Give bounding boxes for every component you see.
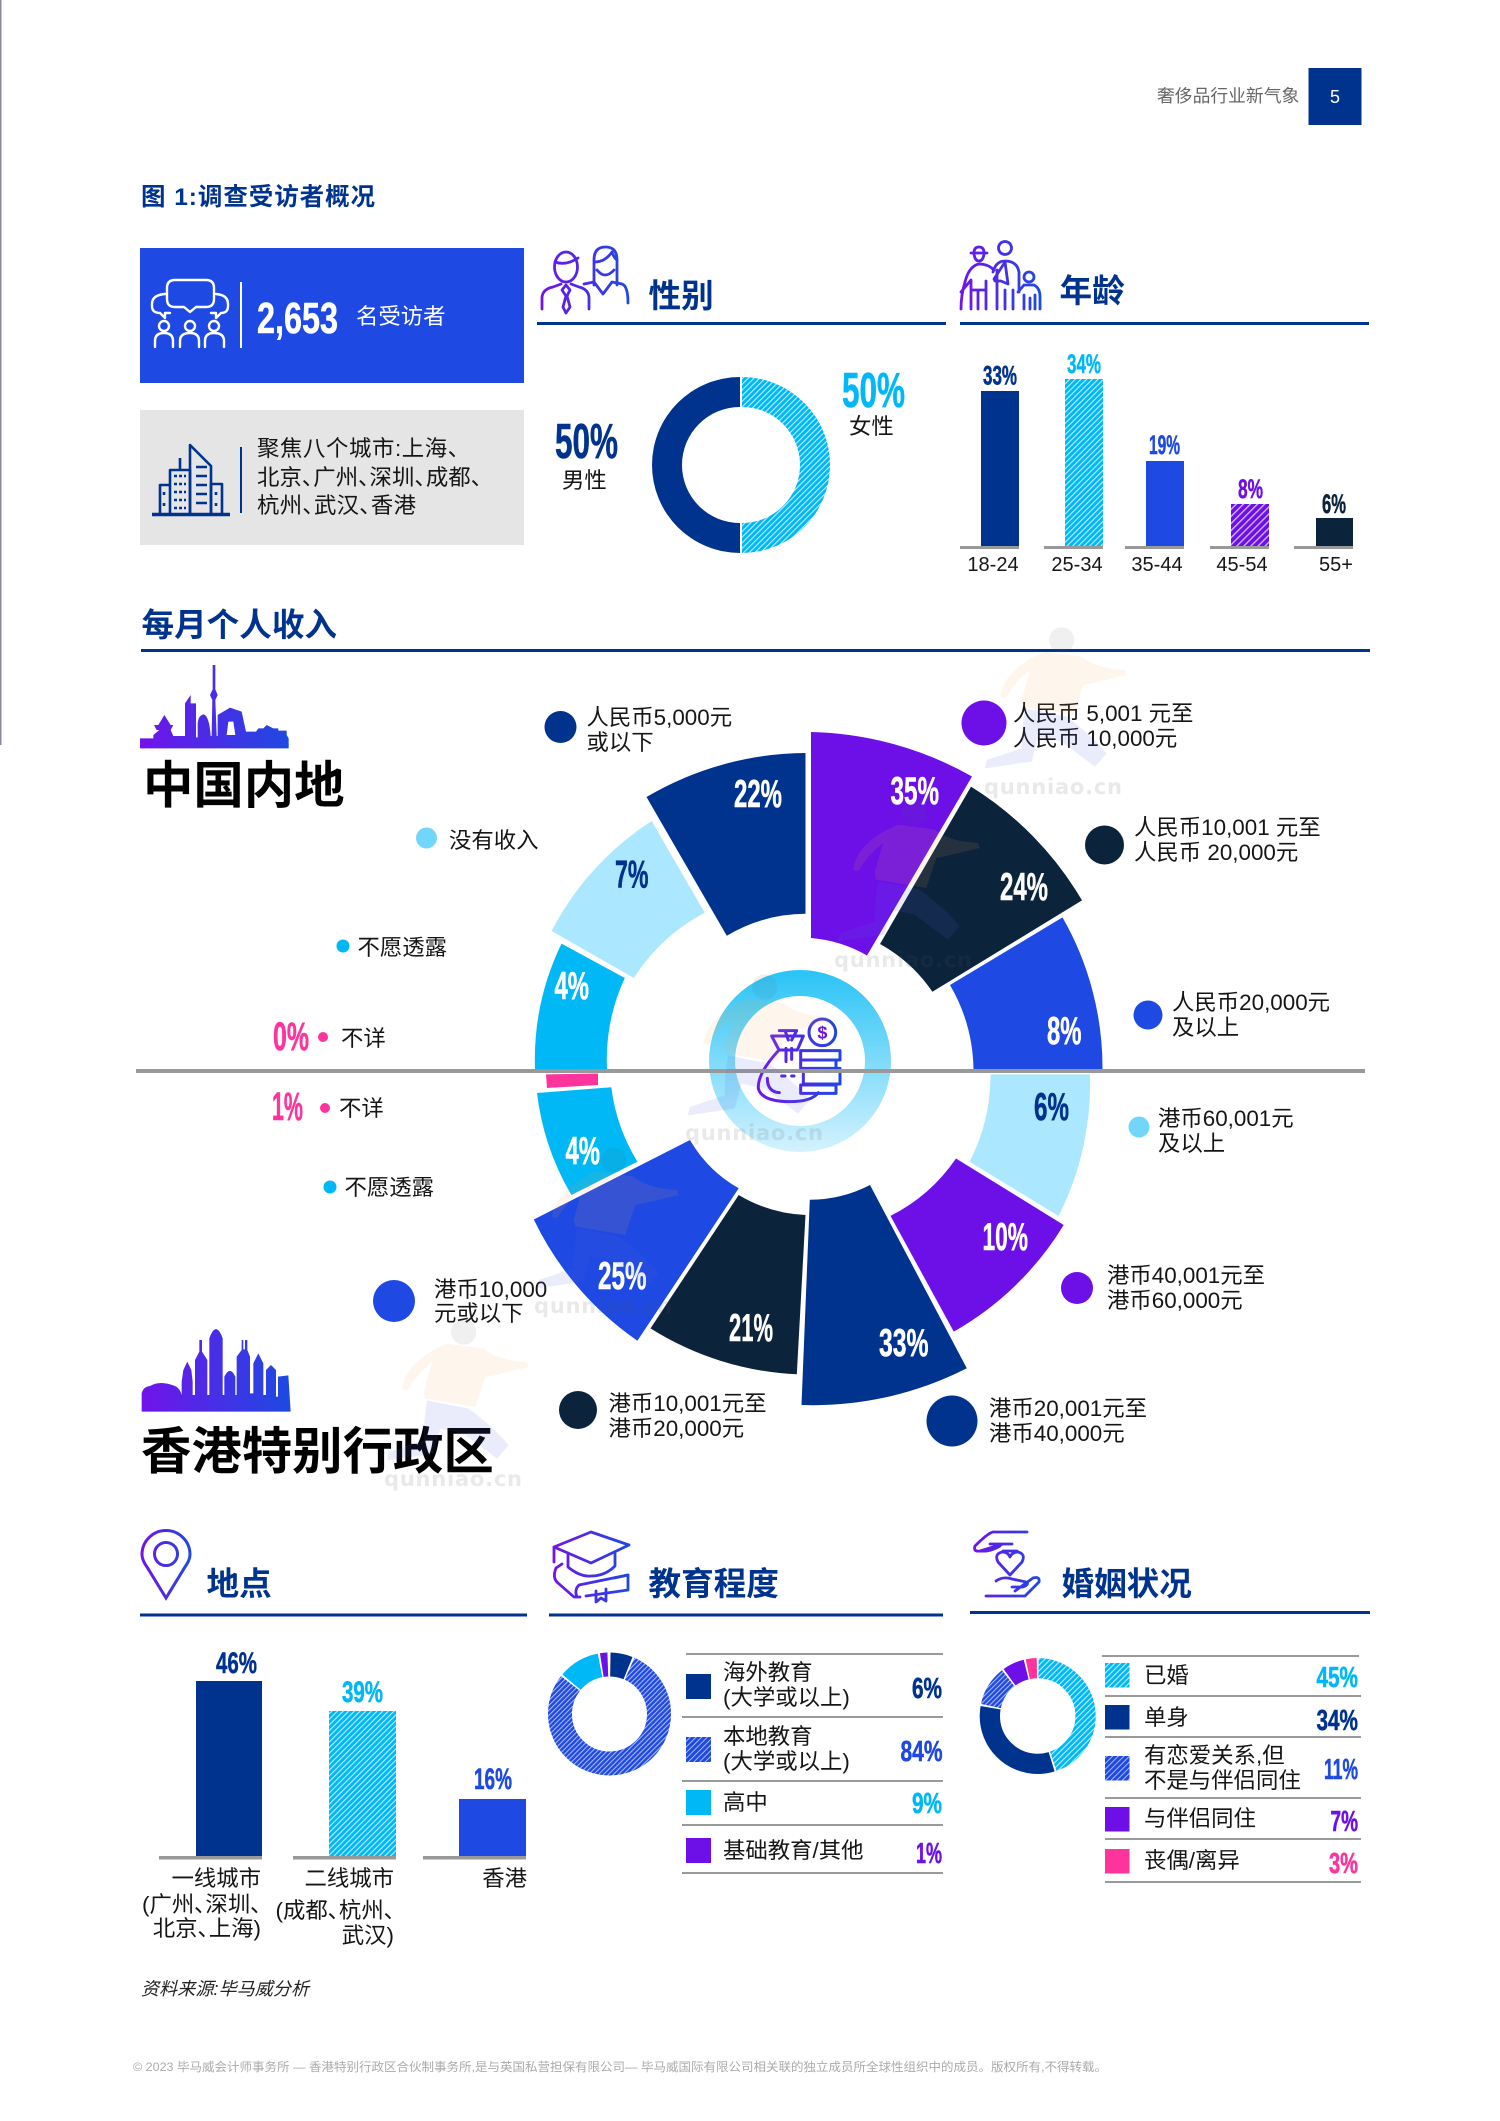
sector 4% bbox=[537, 1087, 637, 1195]
report name: 奢侈品行业新气象 bbox=[1157, 86, 1299, 106]
heading: marital status: 婚姻状况 bbox=[1062, 1565, 1192, 1602]
row: overseas: 6% bbox=[912, 1673, 942, 1705]
percent labels: sectors: 35% bbox=[890, 770, 939, 813]
bar tier 1: 46% bbox=[216, 1647, 257, 1680]
row: single bbox=[1105, 1705, 1358, 1737]
panel: marital status bbox=[970, 1532, 1370, 1883]
respondent label: 名受访者 bbox=[356, 304, 446, 329]
label: male: 50% bbox=[555, 415, 618, 469]
bar 25-34 bbox=[1044, 349, 1103, 576]
legend item: 40,001-60,000: 港币40,001元至 bbox=[1107, 1263, 1265, 1288]
icon: city buildings bbox=[152, 445, 230, 514]
icon: map pin bbox=[142, 1530, 190, 1598]
bar 35-44: 19% bbox=[1149, 430, 1180, 460]
legend item: above 20,000: 人民币20,000元 bbox=[1172, 990, 1330, 1015]
bar 25-34: 25-34 bbox=[1051, 554, 1103, 576]
table: marital status bbox=[1102, 1655, 1361, 1883]
label: female: 50% bbox=[842, 364, 905, 418]
legend item: unknown bbox=[273, 1015, 386, 1059]
sector 7% bbox=[552, 821, 705, 978]
label: male: 男性 bbox=[562, 468, 607, 493]
row: cohabiting: 与伴侣同住 bbox=[1144, 1806, 1256, 1831]
donut: gender bbox=[652, 377, 830, 553]
heading: education: 教育程度 bbox=[648, 1565, 779, 1602]
legend item: 10,001-20,000: 人民币 20,000元 bbox=[1134, 840, 1298, 865]
bar chart: location bbox=[142, 1647, 527, 1948]
percent labels: sectors bbox=[554, 770, 1082, 1365]
label: female: 女性 bbox=[849, 414, 894, 439]
bar tier 1: 北京、上海) bbox=[153, 1916, 261, 1941]
heading rule bbox=[140, 1614, 527, 1616]
bar 45-54: 8% bbox=[1238, 474, 1263, 504]
page number box bbox=[1308, 68, 1362, 125]
donut: marital status bbox=[990, 1668, 1086, 1764]
bar 18-24: 18-24 bbox=[967, 554, 1019, 576]
row: high school: 9% bbox=[912, 1788, 942, 1820]
legend item: above 20,000: 及以上 bbox=[1172, 1015, 1239, 1040]
row: local: 本地教育 bbox=[723, 1724, 813, 1749]
watermark text: qunniao.cn bbox=[984, 775, 1122, 799]
bar 55+: 55+ bbox=[1319, 554, 1353, 576]
bar Hong Kong: 16% bbox=[474, 1763, 512, 1796]
panel: cities bbox=[140, 410, 524, 545]
legend item: 10,000 or less bbox=[373, 1277, 547, 1326]
bar chart: age bbox=[960, 349, 1353, 576]
chart: mainland income sectors bbox=[535, 732, 1103, 1069]
row: basic: 1% bbox=[916, 1838, 942, 1870]
legend item: unknown: 0% bbox=[273, 1015, 309, 1059]
row: widowed or divorced: 丧偶/离异 bbox=[1144, 1848, 1240, 1873]
row: high school: 高中 bbox=[723, 1790, 768, 1815]
watermark text bbox=[384, 775, 1122, 1491]
row: single: 单身 bbox=[1144, 1705, 1189, 1730]
icon: three generations bbox=[961, 242, 1040, 309]
legend item: 5,001-10,000: 人民币 10,000元 bbox=[1013, 726, 1177, 751]
icon: cap and book bbox=[554, 1532, 629, 1602]
percent labels: sectors: 8% bbox=[1047, 1010, 1082, 1053]
bar tier 2: 39% bbox=[342, 1676, 383, 1709]
bar tier 1: (广州、深圳、 bbox=[142, 1892, 261, 1917]
chart: Hong Kong income sectors bbox=[534, 1074, 1090, 1405]
sector 6% bbox=[970, 1074, 1090, 1216]
bar tier 1: 一线城市 bbox=[171, 1866, 261, 1891]
row: married: 45% bbox=[1316, 1662, 1358, 1694]
row: high school bbox=[686, 1788, 942, 1820]
row: dating bbox=[1105, 1743, 1358, 1793]
legend item: 40,001-60,000: 港币60,000元 bbox=[1107, 1288, 1243, 1313]
heading: gender: 性别 bbox=[648, 277, 714, 314]
icon: money bag and coins bbox=[758, 1019, 840, 1102]
center divider bbox=[136, 1069, 1365, 1073]
row: dating: 不是与伴侣同住 bbox=[1144, 1768, 1301, 1793]
legend item: unknown: 不详 bbox=[339, 1096, 384, 1121]
panel: gender bbox=[537, 247, 946, 553]
legend item: 60,001 and above bbox=[1128, 1106, 1294, 1156]
heading: monthly income: 每月个人收入 bbox=[142, 606, 337, 643]
row: basic bbox=[686, 1838, 942, 1870]
row: cohabiting bbox=[1105, 1806, 1358, 1838]
watermark text: qunniao.cn bbox=[384, 1467, 522, 1491]
bar 18-24 bbox=[960, 360, 1019, 576]
legend item: 60,001 and above: 及以上 bbox=[1158, 1131, 1225, 1156]
legend item: 20,001-40,000: 港币20,001元至 bbox=[989, 1396, 1147, 1421]
row: overseas: (大学或以上) bbox=[723, 1685, 850, 1710]
percent labels: sectors: 21% bbox=[729, 1307, 773, 1350]
bar 45-54 bbox=[1210, 474, 1269, 576]
cities text: 聚焦八个城市:上海、 bbox=[257, 436, 459, 461]
icon: man and woman bbox=[542, 247, 628, 313]
row: cohabiting: 7% bbox=[1330, 1806, 1358, 1838]
row: married: 已婚 bbox=[1144, 1663, 1189, 1688]
source note: 资料来源:毕马威分析 bbox=[141, 1979, 311, 1999]
sector 25% bbox=[534, 1140, 739, 1341]
panel: respondents bbox=[140, 248, 524, 383]
bar 35-44: 35-44 bbox=[1131, 554, 1183, 576]
icon: speaking people bbox=[152, 280, 228, 347]
panel: location bbox=[140, 1530, 527, 1948]
row: local: (大学或以上) bbox=[723, 1749, 850, 1774]
center ring bbox=[722, 983, 878, 1139]
percent labels: sectors: 25% bbox=[598, 1255, 646, 1298]
mainland heading: 中国内地 bbox=[143, 757, 345, 814]
row: overseas bbox=[686, 1660, 942, 1710]
percent labels: sectors: 33% bbox=[879, 1322, 928, 1365]
respondent count: 2,653 bbox=[257, 294, 338, 343]
row: dating: 11% bbox=[1324, 1754, 1358, 1786]
watermark text: qunniao.cn bbox=[534, 1294, 672, 1318]
row: basic: 基础教育/其他 bbox=[723, 1838, 864, 1863]
legend item: 60,001 and above: 港币60,001元 bbox=[1158, 1106, 1294, 1131]
legend: mainland income bbox=[273, 700, 1330, 1059]
legend item: unknown: 不详 bbox=[341, 1026, 386, 1051]
percent labels: sectors: 4% bbox=[566, 1130, 600, 1173]
row: dating: 有恋爱关系,但 bbox=[1144, 1743, 1285, 1768]
legend item: 20,001-40,000 bbox=[926, 1396, 1147, 1446]
legend: Hong Kong income bbox=[272, 1085, 1294, 1446]
heading rule bbox=[549, 1614, 943, 1616]
bar Hong Kong bbox=[423, 1763, 527, 1891]
legend item: undisclosed: 不愿透露 bbox=[344, 1175, 434, 1200]
legend item: no income: 没有收入 bbox=[449, 828, 539, 853]
legend item: 10,001-20,000 bbox=[1085, 815, 1321, 865]
legend item: 5,000 or less: 或以下 bbox=[586, 730, 654, 755]
watermark text: qunniao.cn bbox=[834, 948, 972, 972]
bar Hong Kong: 香港 bbox=[482, 1866, 527, 1891]
legend item: unknown bbox=[272, 1085, 384, 1129]
cities text bbox=[257, 436, 482, 518]
percent labels: sectors: 7% bbox=[615, 854, 648, 896]
bar tier 1 bbox=[142, 1647, 262, 1941]
row: married bbox=[1105, 1662, 1358, 1694]
legend item: above 20,000 bbox=[1134, 990, 1330, 1040]
sector 4% bbox=[535, 944, 625, 1069]
heading rule bbox=[960, 322, 1369, 325]
row: local bbox=[686, 1724, 943, 1774]
percent labels: sectors: 10% bbox=[982, 1216, 1028, 1259]
percent labels: sectors: 4% bbox=[554, 965, 589, 1008]
legend item: 10,000 or less: 港币10,000 bbox=[434, 1277, 547, 1302]
percent labels: sectors: 22% bbox=[734, 773, 782, 816]
divider bbox=[240, 447, 242, 513]
bar 55+: 6% bbox=[1322, 489, 1346, 519]
legend item: undisclosed: 不愿透露 bbox=[358, 935, 447, 960]
sector 24% bbox=[880, 787, 1082, 992]
page header bbox=[1157, 68, 1362, 125]
watermark figures bbox=[387, 627, 1127, 1460]
table: education bbox=[682, 1653, 943, 1874]
divider bbox=[240, 282, 242, 348]
row: single: 34% bbox=[1316, 1705, 1358, 1737]
bar 55+ bbox=[1294, 489, 1353, 576]
panel: age bbox=[960, 242, 1369, 576]
Hong Kong heading: 香港特别行政区 bbox=[141, 1423, 494, 1480]
percent labels: sectors: 24% bbox=[1000, 866, 1048, 909]
bar tier 2 bbox=[276, 1676, 396, 1948]
legend item: 5,000 or less: 人民币5,000元 bbox=[586, 705, 732, 730]
sector 21% bbox=[650, 1195, 806, 1374]
sector 35% bbox=[811, 732, 972, 956]
legend item: 5,001-10,000: 人民币 5,001 元至 bbox=[1013, 701, 1193, 726]
percent labels: sectors: 6% bbox=[1034, 1086, 1069, 1129]
row: overseas: 海外教育 bbox=[723, 1660, 813, 1685]
icon: hands and heart bbox=[975, 1532, 1039, 1596]
cities text: 北京、广州、深圳、成都、 bbox=[257, 465, 482, 490]
legend item: 10,001-20,000 bbox=[559, 1391, 767, 1441]
heading rule bbox=[537, 322, 946, 325]
legend item: 20,001-40,000: 港币40,000元 bbox=[989, 1421, 1125, 1446]
sector 8% bbox=[950, 917, 1103, 1069]
legend item: 40,001-60,000 bbox=[1061, 1263, 1265, 1313]
legend item: 5,001-10,000 bbox=[962, 700, 1193, 751]
left page edge bbox=[0, 0, 2, 745]
legend item: 5,000 or less bbox=[544, 705, 732, 755]
heading: age: 年龄 bbox=[1060, 272, 1125, 309]
row: local: 84% bbox=[900, 1736, 943, 1768]
page number box: 5 bbox=[1330, 87, 1340, 107]
row: widowed or divorced bbox=[1105, 1848, 1358, 1880]
bar 45-54: 45-54 bbox=[1216, 554, 1268, 576]
legend item: 10,001-20,000: 人民币10,001 元至 bbox=[1134, 815, 1321, 840]
heading: monthly income bbox=[141, 606, 1370, 652]
donut: education bbox=[560, 1664, 659, 1764]
figure title: 图 1:调查受访者概况 bbox=[141, 183, 375, 211]
bar tier 2: (成都、杭州、 bbox=[276, 1898, 395, 1923]
legend item: 10,001-20,000: 港币20,000元 bbox=[608, 1416, 744, 1441]
sector 33% bbox=[802, 1185, 967, 1405]
footer copyright: © 2023 毕马威会计师事务所 — 香港特别行政区合伙制事务所,是与英国私营担保有限公司— 毕马威国际有限公司相关联的独立成员所全球性组织中的成员。版权所有,不得转载。 bbox=[133, 2059, 1107, 2074]
legend item: 10,001-20,000: 港币10,001元至 bbox=[608, 1391, 767, 1416]
mainland skyline bbox=[140, 665, 289, 748]
bar 18-24: 33% bbox=[983, 360, 1017, 390]
cities text: 杭州、武汉、香港 bbox=[257, 493, 416, 518]
bar 25-34: 34% bbox=[1067, 349, 1101, 379]
icon: money bag and coins: $ bbox=[817, 1023, 827, 1043]
heading rule bbox=[970, 1611, 1370, 1614]
bar tier 2: 二线城市 bbox=[304, 1866, 394, 1891]
sector 22% bbox=[646, 753, 806, 936]
panel: education bbox=[549, 1532, 943, 1874]
label: male bbox=[555, 415, 618, 493]
legend item: 10,000 or less: 元或以下 bbox=[434, 1301, 524, 1326]
sector 1% bbox=[546, 1074, 598, 1088]
legend item: unknown: 1% bbox=[272, 1085, 303, 1129]
bar 35-44 bbox=[1125, 430, 1184, 576]
watermark text: qunniao.cn bbox=[685, 1121, 823, 1145]
label: female bbox=[842, 364, 905, 439]
bar tier 2: 武汉) bbox=[342, 1923, 394, 1948]
row: widowed or divorced: 3% bbox=[1329, 1848, 1358, 1880]
heading: location: 地点 bbox=[206, 1565, 272, 1602]
Hong Kong skyline bbox=[142, 1329, 291, 1412]
sector 10% bbox=[890, 1158, 1064, 1332]
